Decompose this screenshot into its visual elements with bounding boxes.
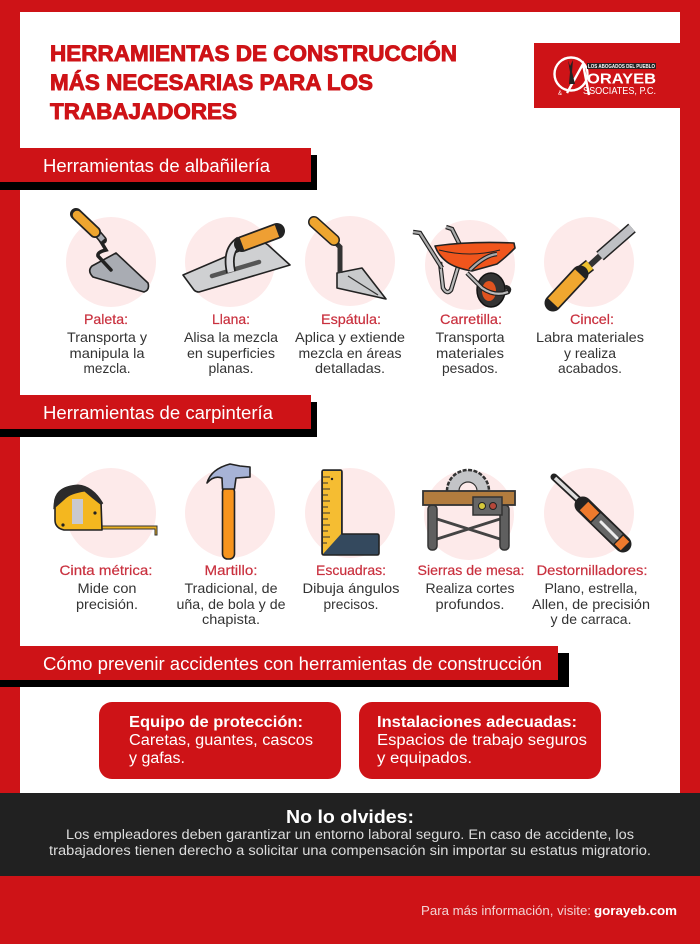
card: equipo de protección: Equipo de protección: xyxy=(129,714,303,731)
tool: cinta métrica: Mide con xyxy=(78,580,136,596)
tool: sierra de mesa xyxy=(418,470,524,612)
tool: destornilladores xyxy=(532,468,650,627)
tool: llana xyxy=(183,217,290,376)
logo: Gorayeb and Associates xyxy=(534,43,680,108)
tool: paleta: Transporta y xyxy=(67,329,147,345)
tool: escuadras xyxy=(302,468,400,612)
tool: cincel: acabados. xyxy=(558,360,622,376)
tool: paleta xyxy=(66,214,156,376)
section heading: prevención: Cómo prevenir accidentes con herramientas de construcción xyxy=(43,654,542,674)
tool: escuadras: Escuadras: xyxy=(316,562,386,578)
logo: Gorayeb and Associates: ORAYEB xyxy=(587,70,656,88)
reminder panel: no lo olvides: trabajadores tienen derecho a solicitar una compensación sin importar su estatus migratorio. xyxy=(49,843,651,858)
tool: llana: Llana: xyxy=(212,311,250,327)
card: instalaciones adecuadas: Instalaciones adecuadas: xyxy=(377,714,577,731)
section heading: prevención xyxy=(0,646,569,687)
tool: carretilla xyxy=(413,220,515,376)
tool: llana: en superficies xyxy=(187,345,275,361)
tool: espátula: Aplica y extiende xyxy=(295,329,405,345)
tool: escuadras: Dibuja ángulos xyxy=(302,580,400,596)
tool: cinta métrica: Cinta métrica: xyxy=(60,562,152,578)
white content panel xyxy=(20,12,680,793)
section heading: albañilería xyxy=(0,148,317,190)
tool: martillo: Martillo: xyxy=(204,562,258,578)
tool: sierra de mesa: Sierras de mesa: xyxy=(418,562,524,578)
logo: Gorayeb and Associates: LOS ABOGADOS DEL PUEBLO xyxy=(588,64,655,70)
tool: destornilladores: Plano, estrella, xyxy=(544,580,638,596)
title xyxy=(50,41,457,124)
tool: martillo: chapista. xyxy=(202,611,260,627)
tool: cincel: Labra materiales xyxy=(536,329,644,345)
footer link: Para más información, visite: xyxy=(421,904,591,918)
logo: Gorayeb and Associates: & xyxy=(558,91,562,97)
tool: cincel: y realiza xyxy=(564,345,616,361)
tool: paleta: mezcla. xyxy=(84,360,130,376)
tool: carretilla: pesados. xyxy=(442,360,498,376)
section heading: carpintería: Herramientas de carpintería xyxy=(43,403,274,423)
tool: carretilla: Carretilla: xyxy=(440,311,502,327)
title: TRABAJADORES xyxy=(50,99,237,124)
tool: espátula xyxy=(295,216,405,376)
tool: destornilladores: Destornilladores: xyxy=(536,562,648,578)
card: instalaciones adecuadas: y equipados. xyxy=(377,750,472,767)
card: equipo de protección: Caretas, guantes, cascos xyxy=(129,732,313,749)
tool: espátula: Espátula: xyxy=(321,311,381,327)
card: instalaciones adecuadas: Espacios de trabajo seguros xyxy=(377,732,587,749)
footer link xyxy=(421,904,677,918)
tool: sierra de mesa: Realiza cortes xyxy=(426,580,514,596)
tool: cinta métrica: precisión. xyxy=(76,596,138,612)
tool: paleta: Paleta: xyxy=(84,311,128,327)
card: equipo de protección xyxy=(99,702,341,779)
tool: cincel: Cincel: xyxy=(570,311,614,327)
tool: carretilla: Transporta xyxy=(436,329,505,345)
title: HERRAMIENTAS DE CONSTRUCCIÓN xyxy=(50,41,457,66)
section heading: albañilería: Herramientas de albañilería xyxy=(43,156,271,176)
title: MÁS NECESARIAS PARA LOS xyxy=(50,70,373,95)
tool: espátula: detalladas. xyxy=(315,360,385,376)
footer link: gorayeb.com xyxy=(594,904,677,918)
reminder panel: no lo olvides: No lo olvides: xyxy=(286,807,414,827)
reminder panel: no lo olvides: Los empleadores deben garantizar un entorno laboral seguro. En caso de accidente, los xyxy=(66,827,634,842)
tool: cincel xyxy=(536,217,644,376)
tool: llana: Alisa la mezcla xyxy=(184,329,278,345)
tool: cinta métrica xyxy=(55,468,157,612)
tool: escuadras: precisos. xyxy=(324,596,378,612)
tool: destornilladores: Allen, de precisión xyxy=(532,596,650,612)
card: equipo de protección: y gafas. xyxy=(129,750,185,767)
tool: martillo: Tradicional, de xyxy=(184,580,278,596)
card: instalaciones adecuadas xyxy=(359,702,601,779)
tool: martillo xyxy=(176,464,286,627)
tool: destornilladores: y de carraca. xyxy=(550,611,632,627)
section heading: carpintería xyxy=(0,395,317,437)
logo: Gorayeb and Associates: SSOCIATES, P.C. xyxy=(583,85,656,97)
tool: sierra de mesa: profundos. xyxy=(436,596,504,612)
tool: paleta: manipula la xyxy=(70,345,145,361)
tool: carretilla: materiales xyxy=(436,345,504,361)
tool: llana: planas. xyxy=(208,360,254,376)
reminder panel: no lo olvides xyxy=(0,793,700,876)
tool: espátula: mezcla en áreas xyxy=(298,345,402,361)
tool: martillo: uña, de bola y de xyxy=(176,596,286,612)
